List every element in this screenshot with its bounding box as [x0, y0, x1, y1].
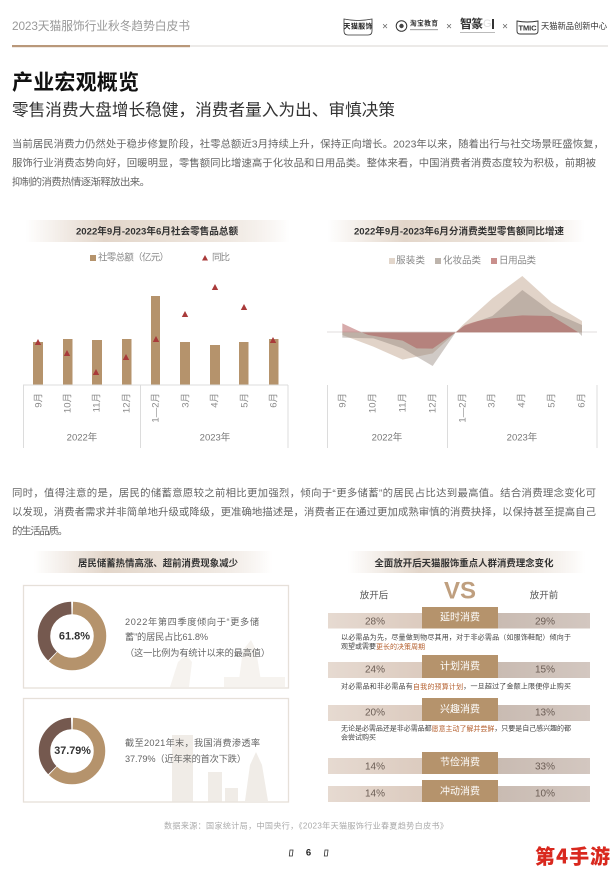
card text: 蓄”的居民占比61.8% [125, 631, 208, 642]
column label: before: 放开前 [530, 590, 558, 602]
logo: TMIC 天猫新品创新中心: TMIC [518, 24, 537, 32]
legend [389, 254, 536, 266]
chart heading: 2022年9月-2023年6月社会零售品总额 [76, 226, 238, 238]
legend: 同比 [212, 252, 230, 264]
axis: 9月 [34, 393, 44, 408]
page number: 6 [306, 848, 311, 858]
second paragraph: 同时，值得注意的是，居民的储蓄意愿较之前相比更加强烈，倾向于“更多储蓄”的居民占比达到最高值。结合消费理念变化可 [12, 486, 596, 500]
donut value: 37.79% [54, 745, 91, 757]
logo: 智篆GI: 智篆 [460, 16, 483, 31]
axis: 1—2月 [458, 393, 468, 423]
cross: × [446, 22, 452, 32]
row: 延时消费: 29% [535, 616, 555, 628]
logo: 淘宝教育: 淘宝教育 [410, 18, 438, 28]
row: 延时消费: 延时消费 [440, 610, 480, 624]
axis: 5月 [240, 393, 250, 408]
report title: 2023天猫服饰行业秋冬趋势白皮书 [12, 19, 190, 33]
row: 兴趣消费: 13% [535, 708, 555, 718]
axis: 2022年 [67, 432, 98, 444]
row: 节俭消费 [328, 752, 590, 774]
panel heading: consumption attitudes: 全面放开后天猫服饰重点人群消费理念变化 [374, 558, 554, 568]
axis: 4月 [210, 393, 220, 408]
row: 兴趣消费: 兴趣消费 [440, 702, 480, 716]
panel: category growth area chart [327, 220, 597, 448]
legend: 化妆品类 [443, 254, 481, 266]
chart heading [25, 220, 290, 242]
logo: 天猫服饰 [344, 19, 372, 35]
watermark: bars [172, 735, 268, 802]
axis [23, 385, 288, 448]
legend: 社零总额（亿元） [98, 252, 169, 264]
row: 延时消费: 28% [365, 616, 385, 628]
panel heading: savings: 居民储蓄热情高涨、超前消费现象减少 [78, 558, 239, 568]
intro paragraph: 抑制的消费热情逐渐释放出来。 [12, 176, 150, 188]
row: 节俭消费: 14% [365, 762, 385, 772]
row: 冲动消费: 14% [365, 788, 385, 800]
row: 冲动消费: 10% [535, 788, 555, 800]
row: 延时消费 [328, 607, 590, 628]
note: 延时消费: 以必需品为先，尽量做到物尽其用，对于非必需品（如服饰鞋配）倾向于 [341, 632, 571, 642]
axis: 2023年 [200, 432, 231, 444]
card text: 37.79%（近年来的首次下跌） [125, 753, 246, 764]
intro paragraph: 服饰行业消费态势向好，回暖明显，零售额同比增速高于化妆品和日用品类。整体来看，中国消费者消费态度较为积极，前期被 [12, 156, 597, 170]
axis: 3月 [180, 393, 192, 408]
legend [90, 252, 230, 264]
cross: × [502, 22, 508, 32]
panel heading: consumption attitudes [348, 551, 585, 573]
intro paragraph: 当前居民消费力仍然处于稳步修复阶段，社零总额近3月持续上升，保持正向增长。2023年以来，随着出行与社交场景旺盛恢复， [12, 138, 604, 150]
chart heading: 2022年9月-2023年6月分消费类型零售额同比增速 [354, 226, 564, 238]
axis: 4月 [516, 393, 528, 408]
donut value: 61.8% [59, 630, 90, 642]
column label: after: 放开后 [360, 590, 389, 602]
row: 兴趣消费: 20% [365, 708, 385, 718]
card text: 截至2021年末，我国消费渗透率 [125, 737, 260, 748]
section heading: 产业宏观概览 [12, 70, 139, 94]
row: 冲动消费: 冲动消费 [440, 784, 480, 798]
donut chart [44, 724, 100, 778]
axis: 2022年 [372, 432, 403, 444]
card text [125, 616, 270, 658]
panel heading: savings [34, 551, 272, 573]
axis: 10月 [368, 393, 378, 413]
second paragraph [12, 486, 596, 538]
axis [328, 385, 597, 448]
page header [12, 16, 608, 47]
watermark: 第4手游: 第4手游 [535, 840, 610, 870]
card text: 2022年第四季度倾向于“更多储 [125, 616, 259, 627]
note: 计划消费: 对必需品和非必需品有自我的预算计划，一旦超过了金额上限便停止购买 [341, 682, 571, 690]
zero line [327, 332, 597, 333]
row: 计划消费: 15% [535, 664, 555, 676]
header rule [12, 45, 608, 47]
row: 冲动消费 [328, 780, 590, 802]
data source: 数据来源：国家统计局，中国央行，《2023年天猫服饰行业春夏趋势白皮书》 [164, 820, 448, 830]
legend: 日用品类 [499, 254, 536, 266]
comparison panel [328, 578, 590, 802]
cross: × [382, 22, 388, 32]
logo: 智篆GI: G [483, 18, 492, 30]
row: 节俭消费: 33% [535, 762, 555, 772]
axis: 6月 [268, 393, 280, 408]
card: consumption rate 37.79% [24, 698, 288, 802]
section subheading: 零售消费大盘增长稳健，消费者量入为出、审慎决策 [12, 100, 395, 120]
axis: 2023年 [507, 432, 538, 444]
logo: 淘宝教育 [396, 18, 438, 31]
card text: （这一比例为有统计以来的最高值） [125, 647, 270, 658]
panel: retail total bar chart [23, 220, 290, 448]
row: 计划消费: 计划消费 [440, 660, 480, 672]
row: 节俭消费: 节俭消费 [440, 756, 480, 768]
logo: TMIC 天猫新品创新中心 [517, 21, 608, 34]
axis: 3月 [486, 393, 498, 408]
donut chart [44, 608, 100, 664]
axis: 1—2月 [150, 393, 162, 423]
axis: 11月 [92, 393, 102, 412]
note: 兴趣消费 [341, 724, 571, 742]
axis: 11月 [398, 393, 408, 412]
logo: 天猫服饰: 天猫服饰 [344, 22, 372, 30]
intro paragraph [12, 138, 604, 188]
row: 计划消费: 24% [365, 664, 385, 676]
second paragraph: 的生活品质。 [12, 524, 68, 538]
note: 延时消费 [341, 632, 571, 650]
card: savings share 61.8% [24, 586, 288, 688]
page number [289, 848, 328, 858]
legend: 服装类 [396, 254, 425, 266]
year-on-year markers [35, 284, 276, 375]
row: 计划消费 [328, 655, 590, 678]
VS heading: VS [444, 578, 476, 604]
logo: 智篆GI [460, 16, 495, 33]
area series [342, 276, 582, 366]
axis: 10月 [62, 393, 74, 413]
axis: 6月 [576, 393, 588, 408]
row: 兴趣消费 [328, 698, 590, 721]
logo: TMIC 天猫新品创新中心: 天猫新品创新中心 [541, 21, 608, 31]
axis: 12月 [428, 393, 438, 413]
axis: 12月 [122, 393, 132, 413]
axis: 5月 [546, 393, 558, 408]
chart heading [327, 220, 585, 242]
card text [125, 737, 260, 764]
note: 延时消费: 观望或需要更长的决策周期 [341, 642, 425, 650]
note: 兴趣消费: 无论是必需品还是非必需品都愿意主动了解并尝鲜，只要是自己感兴趣的都 [341, 724, 571, 732]
watermark: figures [170, 640, 285, 687]
note: 兴趣消费: 会尝试购买 [341, 732, 376, 742]
bars [33, 296, 278, 385]
second paragraph: 以发现，消费者需求并非简单地升级或降级，更准确地描述是，消费者正在通过更加成熟审慎的消费抉择，以保持甚至提高自己 [12, 506, 596, 518]
axis: 9月 [338, 393, 348, 408]
